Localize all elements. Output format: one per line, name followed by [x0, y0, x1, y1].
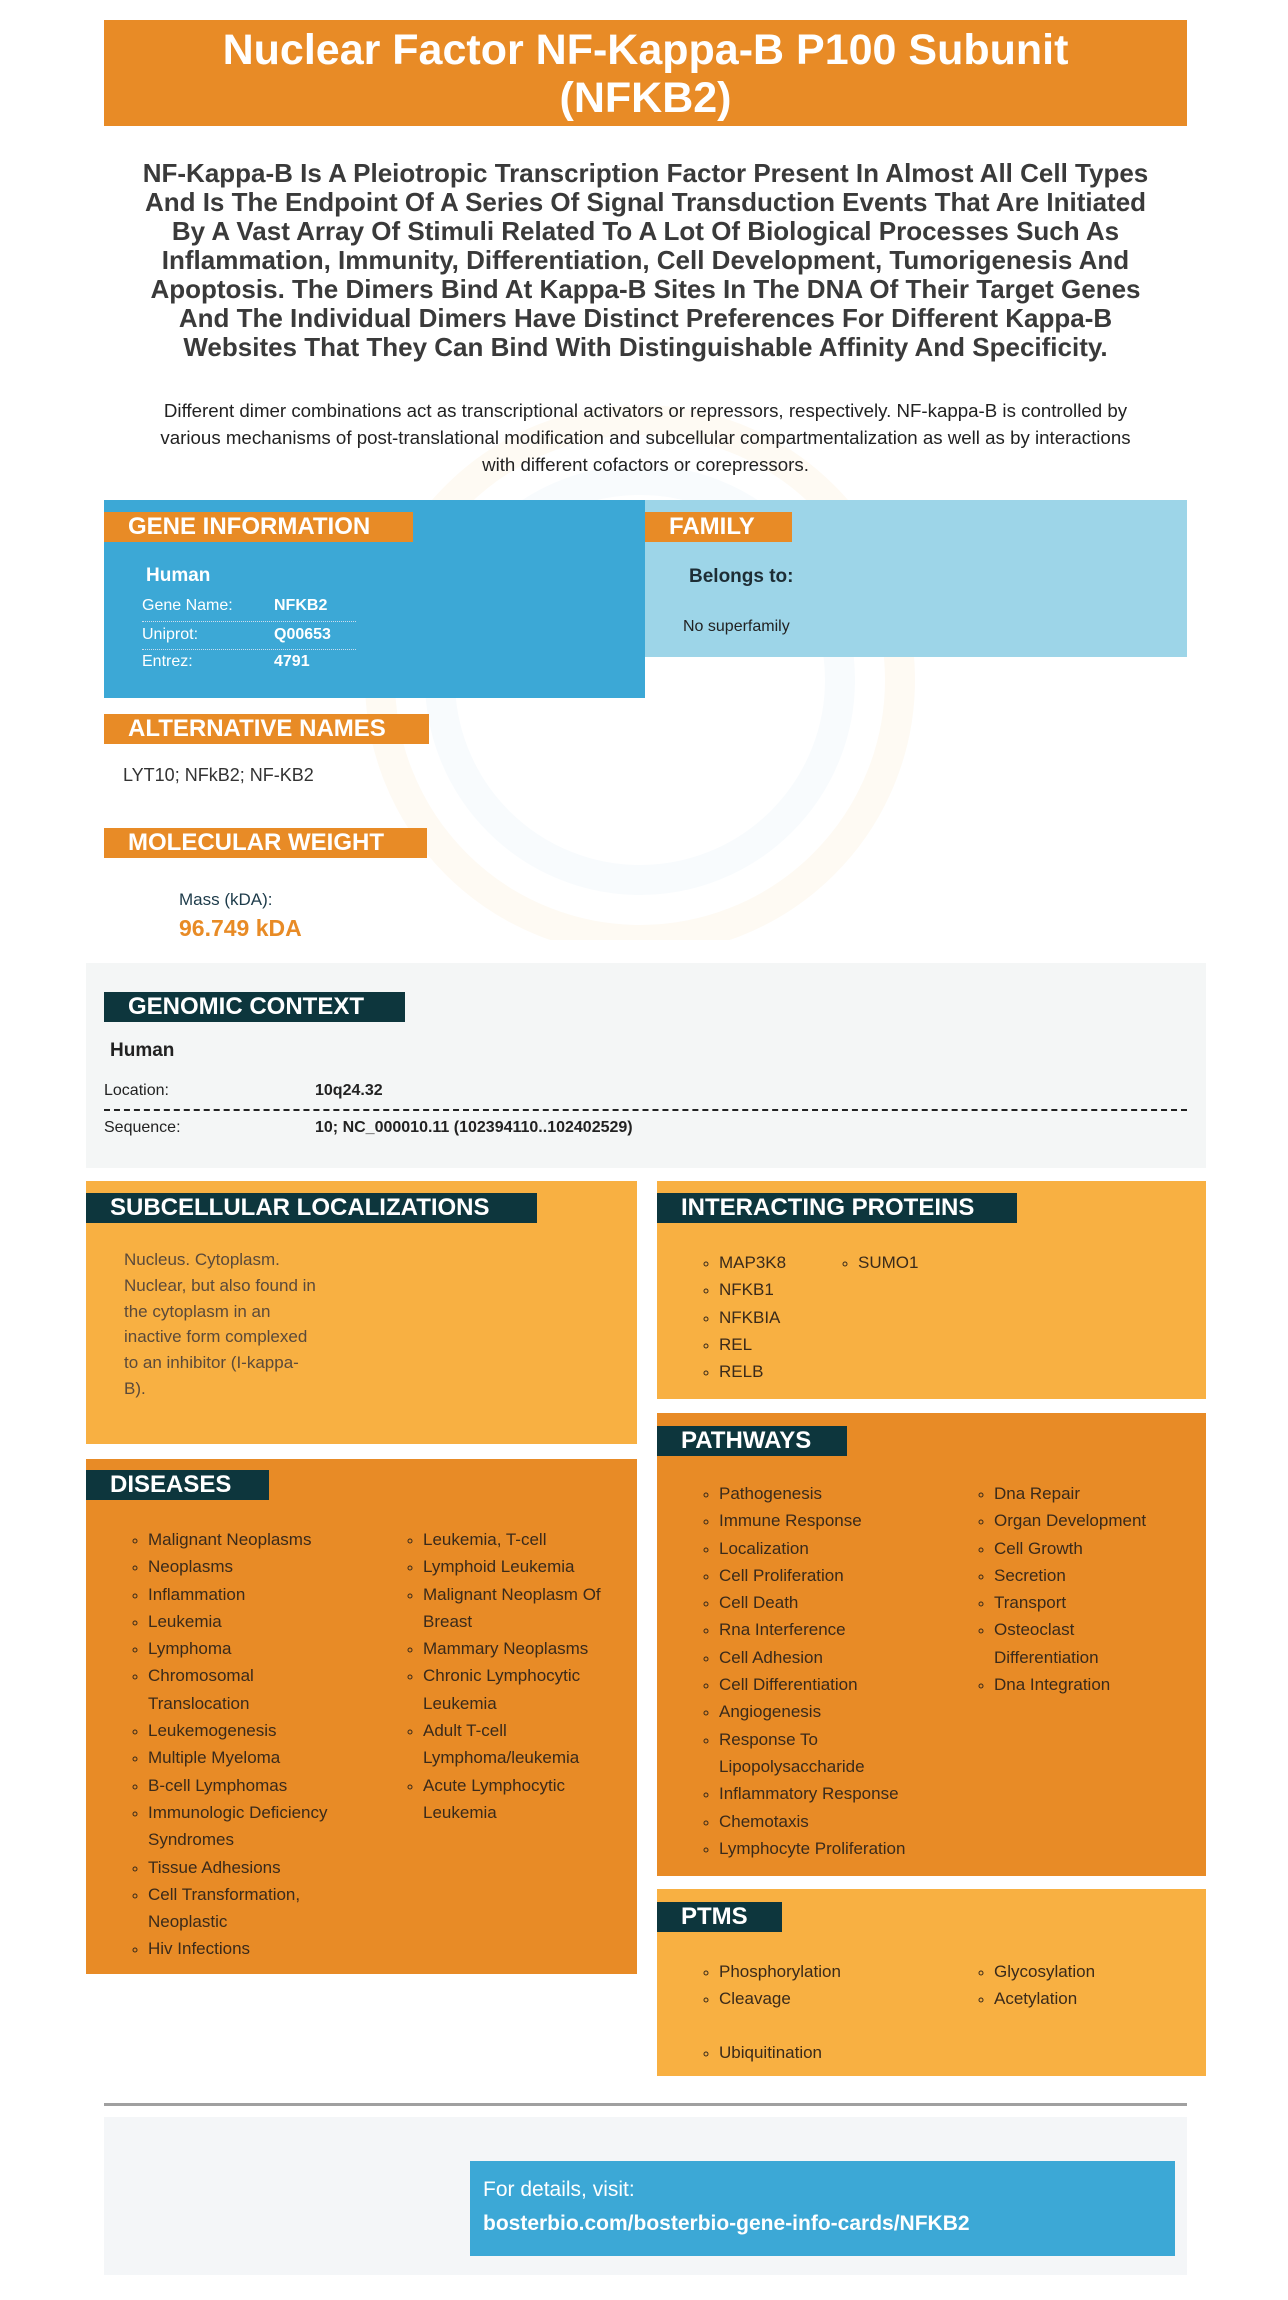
- title: [104, 20, 1187, 126]
- summary bold: Websites That They Can Bind With Distinguishable Affinity And Specificity.: [183, 332, 1108, 362]
- panel: ptms: Acetylation: [994, 1989, 1077, 2008]
- disease list: Neoplasms: [148, 1557, 233, 1576]
- gene rows: Q00653: [274, 626, 331, 643]
- heading: gene information: GENE INFORMATION: [128, 513, 370, 540]
- sequence row: [104, 1119, 633, 1136]
- heading: family: FAMILY: [669, 513, 755, 540]
- pathway list: Cell Proliferation: [719, 1566, 844, 1585]
- species: Human: [110, 1040, 174, 1061]
- no superfamily: No superfamily: [683, 618, 790, 635]
- pathway list: Angiogenesis: [719, 1702, 821, 1721]
- gene rows: NFKB2: [274, 597, 327, 614]
- disease list: Lymphoma: [148, 1639, 231, 1658]
- panel: pathways: Differentiation: [994, 1648, 1099, 1667]
- panel: diseases: Mammary Neoplasms: [423, 1639, 588, 1658]
- mass: 96.749 kDA: [179, 915, 302, 941]
- sequence row: Sequence:: [104, 1119, 181, 1136]
- panel: pathways: Secretion: [994, 1566, 1066, 1585]
- panel: diseases: Chronic Lymphocytic: [423, 1666, 580, 1685]
- panel: pathways: Cell Growth: [994, 1539, 1083, 1558]
- localization text: B).: [124, 1379, 146, 1398]
- panel: diseases: Leukemia: [423, 1694, 497, 1713]
- summary bold: And The Individual Dimers Have Distinct Preferences For Different Kappa-B: [179, 303, 1112, 333]
- title: Nuclear Factor NF-Kappa-B P100 Subunit: [223, 26, 1068, 74]
- heading: molecular weight: MOLECULAR WEIGHT: [128, 829, 384, 856]
- gene rows: Gene Name:: [142, 597, 233, 614]
- disease list: Leukemia: [148, 1612, 222, 1631]
- localization text: to an inhibitor (I-kappa-: [124, 1353, 299, 1372]
- panel: genomic context: [86, 963, 1206, 1168]
- localization text: Nucleus. Cytoplasm.: [124, 1250, 280, 1269]
- disease list: Multiple Myeloma: [148, 1748, 280, 1767]
- species: Human: [146, 565, 210, 586]
- location row: 10q24.32: [315, 1082, 383, 1099]
- panel: diseases: Breast: [423, 1612, 472, 1631]
- pathway list: Response To: [719, 1730, 818, 1749]
- gene rows: [142, 597, 356, 670]
- summary bold: By A Vast Array Of Stimuli Related To A Lot Of Biological Processes Such As: [172, 216, 1119, 246]
- panel: pathways: Dna Repair: [994, 1484, 1080, 1503]
- heading: family: [645, 512, 792, 542]
- disease list: Inflammation: [148, 1585, 245, 1604]
- protein list: RELB: [719, 1362, 763, 1381]
- panel: diseases: Leukemia, T-cell: [423, 1530, 546, 1549]
- pathway list: [704, 1484, 905, 1858]
- disease list: Hiv Infections: [148, 1939, 250, 1958]
- summary bold: NF-Kappa-B Is A Pleiotropic Transcription Factor Present In Almost All Cell Types: [143, 158, 1148, 188]
- pathway list: Chemotaxis: [719, 1812, 809, 1831]
- localization text: inactive form complexed: [124, 1327, 307, 1346]
- pathway list: Cell Death: [719, 1593, 798, 1612]
- disease list: Tissue Adhesions: [148, 1858, 281, 1877]
- title: (NFKB2): [560, 74, 731, 122]
- disease list: Chromosomal: [148, 1666, 254, 1685]
- panel: diseases: Adult T-cell: [423, 1721, 507, 1740]
- localization text: the cytoplasm in an: [124, 1302, 270, 1321]
- localization text: Nuclear, but also found in: [124, 1276, 316, 1295]
- pathway list: Rna Interference: [719, 1620, 846, 1639]
- link box: For details, visit:: [483, 2178, 635, 2201]
- disease list: B-cell Lymphomas: [148, 1776, 287, 1795]
- heading: diseases: [86, 1470, 269, 1500]
- pathway list: Cell Differentiation: [719, 1675, 858, 1694]
- panel: pathways: [657, 1413, 1206, 1876]
- panel: interacting proteins: SUMO1: [858, 1253, 918, 1272]
- link box: [470, 2161, 1175, 2256]
- sequence row: 10; NC_000010.11 (102394110..102402529): [315, 1119, 633, 1136]
- ptm list: Ubiquitination: [719, 2043, 822, 2062]
- panel: pathways: Transport: [994, 1593, 1066, 1612]
- summary bold: Inflammation, Immunity, Differentiation, Cell Development, Tumorigenesis And: [162, 245, 1129, 275]
- localization text: [124, 1250, 316, 1398]
- ptm list: Phosphorylation: [719, 1962, 841, 1981]
- description: with different cofactors or corepressors.: [482, 454, 809, 475]
- panel: pathways: Organ Development: [994, 1511, 1146, 1530]
- summary bold: [143, 158, 1148, 362]
- disease list: Malignant Neoplasms: [148, 1530, 311, 1549]
- panel: subcellular localizations: [86, 1181, 637, 1444]
- panel: diseases: Acute Lymphocytic: [423, 1776, 565, 1795]
- summary bold: Apoptosis. The Dimers Bind At Kappa-B Sites In The DNA Of Their Target Genes: [150, 274, 1141, 304]
- ptm list: Cleavage: [719, 1989, 791, 2008]
- summary bold: And Is The Endpoint Of A Series Of Signal Transduction Events That Are Initiated: [145, 187, 1146, 217]
- panel: diseases: Malignant Neoplasm Of: [423, 1585, 601, 1604]
- heading: interacting proteins: INTERACTING PROTEINS: [681, 1194, 974, 1221]
- heading: ptms: [657, 1902, 782, 1932]
- alternative names text: LYT10; NFkB2; NF-KB2: [123, 765, 314, 785]
- panel: gene information: [104, 500, 645, 698]
- panel: pathways: Dna Integration: [994, 1675, 1110, 1694]
- heading: alternative names: ALTERNATIVE NAMES: [128, 715, 386, 742]
- panel: pathways: Osteoclast: [994, 1620, 1074, 1639]
- disease list: Translocation: [148, 1694, 249, 1713]
- pathway list: Inflammatory Response: [719, 1784, 899, 1803]
- heading: diseases: DISEASES: [110, 1471, 231, 1498]
- panel: diseases: Lymphoid Leukemia: [423, 1557, 575, 1576]
- disease list: Neoplastic: [148, 1912, 227, 1931]
- disease list: [132, 1530, 328, 1958]
- heading: genomic context: GENOMIC CONTEXT: [128, 993, 364, 1020]
- panel: diseases: Leukemia: [423, 1803, 497, 1822]
- location row: [104, 1082, 383, 1099]
- disease list: Immunologic Deficiency: [148, 1803, 328, 1822]
- description: [160, 400, 1131, 475]
- panel: interacting proteins: [657, 1181, 1206, 1399]
- description: Different dimer combinations act as transcriptional activators or repressors, respectively. NF-kappa-B is controlled by: [164, 400, 1127, 421]
- protein list: NFKBIA: [719, 1308, 780, 1327]
- pathway list: Lipopolysaccharide: [719, 1757, 865, 1776]
- panel: ptms: Glycosylation: [994, 1962, 1095, 1981]
- link box: bosterbio.com/bosterbio-gene-info-cards/NFKB2: [483, 2212, 970, 2235]
- gene rows: Uniprot:: [142, 626, 198, 643]
- protein list: REL: [719, 1335, 752, 1354]
- heading: pathways: [657, 1426, 847, 1456]
- heading: pathways: PATHWAYS: [681, 1427, 811, 1454]
- footer: [104, 2117, 1187, 2275]
- description: various mechanisms of post-translational modification and subcellular compartmentalization as well as by interactions: [160, 427, 1131, 448]
- pathway list: Immune Response: [719, 1511, 862, 1530]
- watermark rings: [366, 405, 915, 940]
- disease list: Cell Transformation,: [148, 1885, 300, 1904]
- disease list: Leukemogenesis: [148, 1721, 277, 1740]
- panel: diseases: [86, 1459, 637, 1974]
- pathway list: Pathogenesis: [719, 1484, 822, 1503]
- panel: family: [645, 500, 1187, 657]
- panel: diseases: Lymphoma/leukemia: [423, 1748, 579, 1767]
- ptm list: [704, 1962, 841, 2062]
- pathway list: Cell Adhesion: [719, 1648, 823, 1667]
- heading: ptms: PTMS: [681, 1903, 748, 1930]
- protein list: NFKB1: [719, 1280, 774, 1299]
- disease list: Syndromes: [148, 1830, 234, 1849]
- pathway list: Lymphocyte Proliferation: [719, 1839, 905, 1858]
- heading: subcellular: SUBCELLULAR LOCALIZATIONS: [110, 1194, 490, 1221]
- mass: [179, 890, 302, 941]
- gene rows: Entrez:: [142, 653, 193, 670]
- gene rows: 4791: [274, 653, 310, 670]
- protein list: [704, 1253, 786, 1381]
- pathway list: Localization: [719, 1539, 809, 1558]
- mass: Mass (kDA):: [179, 890, 272, 909]
- location row: Location:: [104, 1082, 169, 1099]
- belongs to: Belongs to:: [689, 566, 794, 587]
- protein list: MAP3K8: [719, 1253, 786, 1272]
- panel: ptms: [657, 1889, 1206, 2076]
